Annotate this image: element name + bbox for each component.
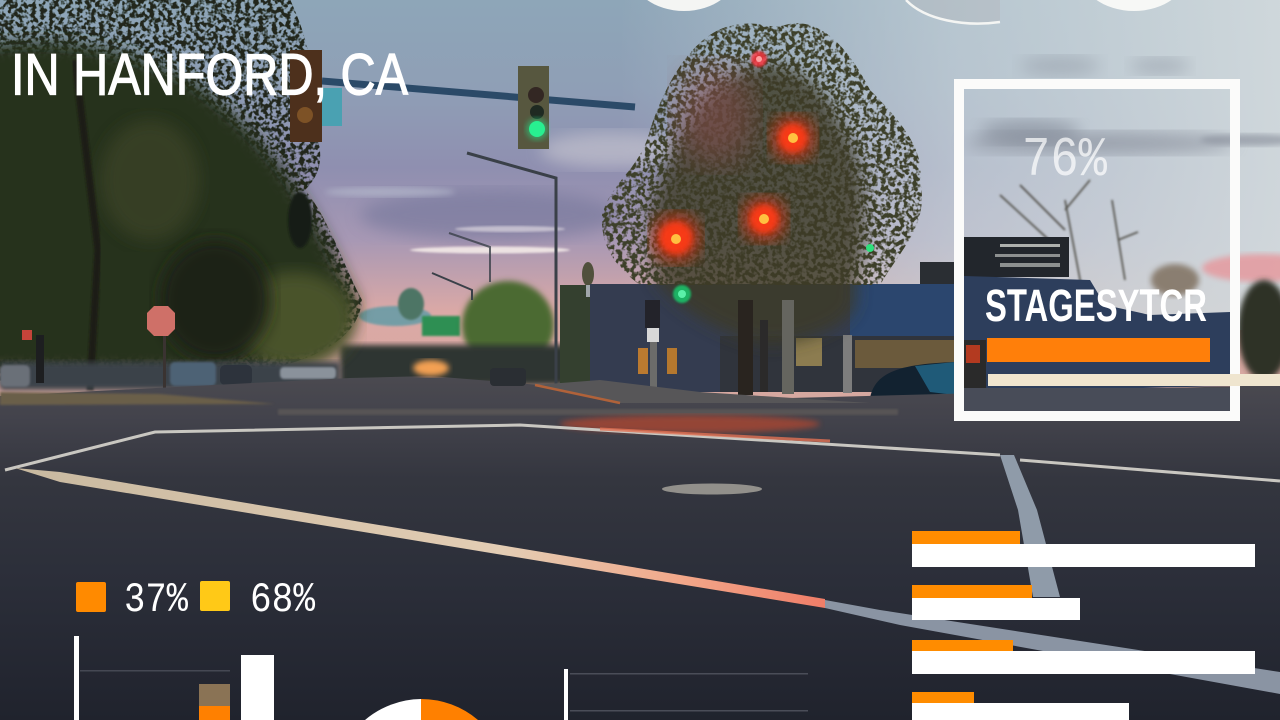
background: distant trees and horizon: [340, 262, 606, 385]
chart legend: [76, 576, 316, 624]
row 3: [912, 640, 1255, 674]
bare tree inside panel: [1000, 180, 1138, 290]
right tree with red lights: [602, 23, 922, 400]
left roadside cars and sign: [0, 306, 340, 400]
panel pale bar: [988, 374, 1280, 386]
left tree mass: [0, 0, 362, 390]
glowing signal lights: [652, 51, 874, 303]
right-hand tree at edge: [1238, 280, 1280, 380]
traffic signal: green: [518, 66, 549, 149]
road surface: [0, 360, 1280, 720]
street lights: [432, 153, 556, 385]
background: evening sky: [0, 0, 1280, 400]
panel frame: [959, 84, 1235, 416]
row 4: [912, 692, 1129, 720]
row 1: [912, 531, 1255, 567]
legend swatch: yellow: [200, 581, 230, 611]
horizontal bar chart: [912, 531, 1255, 720]
building: [590, 262, 955, 398]
panel building: [964, 237, 1230, 411]
donut chart: [365, 699, 478, 720]
legend value: 37%: 37%: [124, 576, 189, 624]
panel value: 76%: [1022, 128, 1107, 192]
legend swatch: orange: [76, 582, 106, 612]
bar chart: vertical bars: [74, 636, 274, 720]
traffic signal mast arm: [322, 81, 635, 107]
top circles: [630, 0, 1189, 24]
road markings: [5, 425, 1280, 694]
legend value: 68%: 68%: [250, 576, 316, 624]
line chart axis: [564, 669, 808, 720]
title: IN HANFORD, CA: [11, 42, 408, 108]
panel orange bar: [987, 338, 1210, 362]
row 2: [912, 585, 1080, 620]
panel: stage statistic: [959, 84, 1280, 416]
traffic signal: left: [290, 50, 342, 142]
